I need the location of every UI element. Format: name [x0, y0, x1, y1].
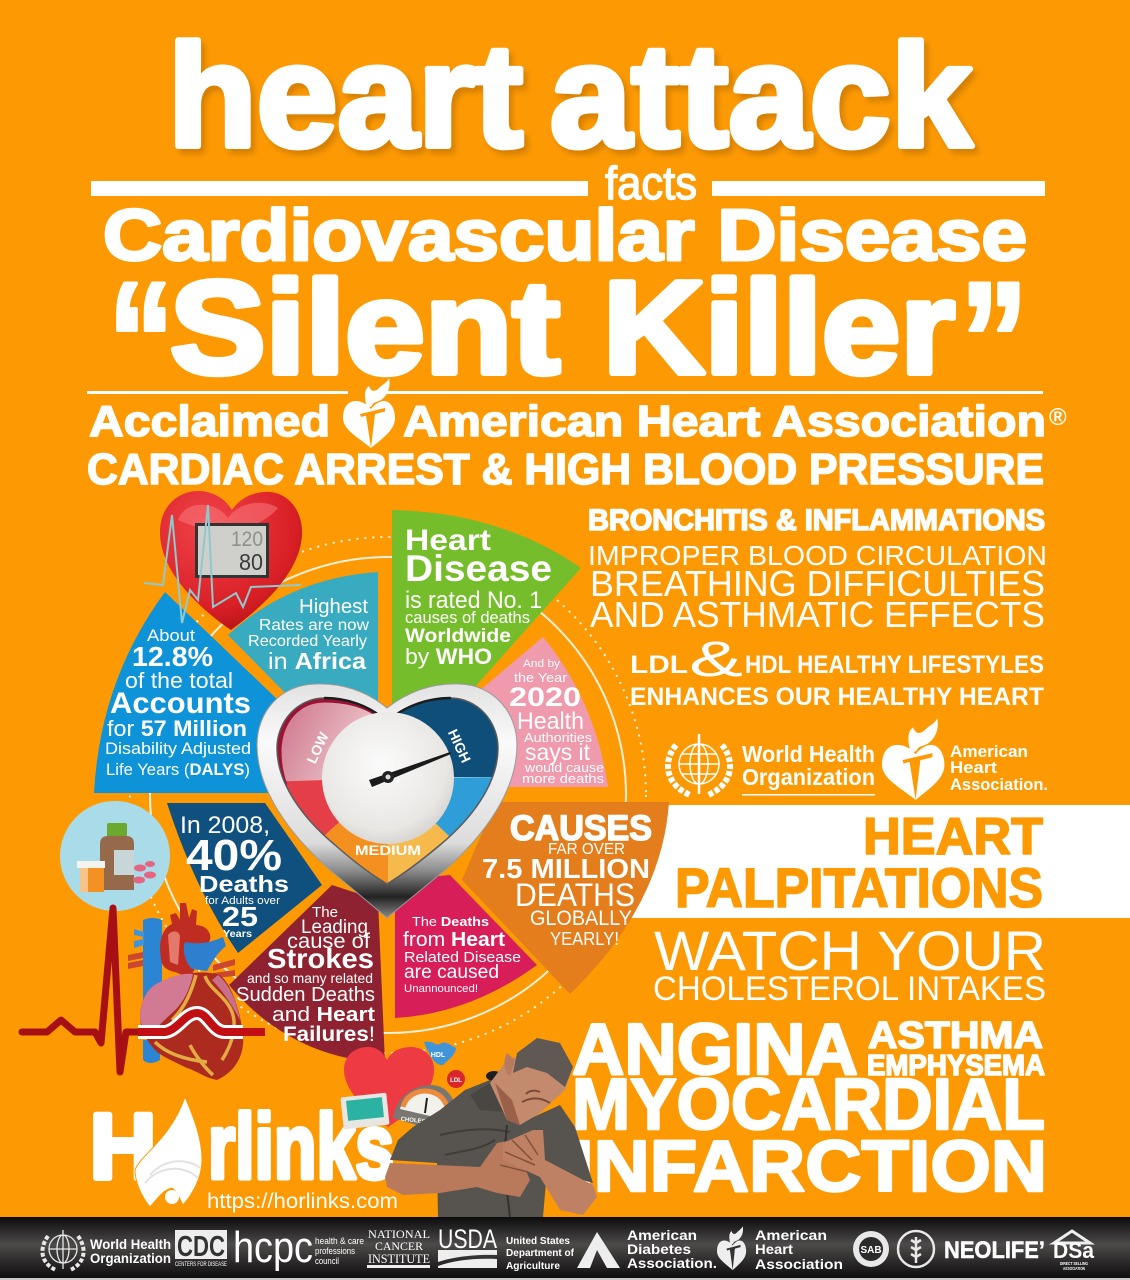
panel: heart disease rated No. 1: causes of deaths: [405, 608, 530, 627]
logo: American Diabetes Association: Association.: [627, 1255, 717, 1271]
right column text: BREATHING DIFFICULTIES: [590, 563, 1045, 604]
panel: leading cause of strokes: and Heart: [272, 1004, 375, 1026]
panel: by the year 2020: more deaths: [522, 771, 605, 786]
panel: leading cause of strokes: Failures!: [283, 1023, 375, 1046]
right column text: LDL: [630, 651, 688, 679]
panel: leading cause of strokes: Strokes: [267, 943, 374, 974]
logo: hcpc: council: [315, 1256, 339, 1266]
text: angina, asthma, emphysema, myocardial infarction: EMPHYSEMA: [867, 1050, 1045, 1082]
logo: SAB seal: [853, 1231, 889, 1267]
text: angina, asthma, emphysema, myocardial infarction: [572, 1010, 1047, 1207]
panel: heart disease rated No. 1: Heart: [405, 524, 491, 557]
heading: Acclaimed American Heart Association: Acclaimed: [89, 397, 330, 446]
panel: heart disease rated No. 1: by WHO: [405, 644, 492, 669]
panel: causes over 7.5 million deaths: 7.5 MILLION: [482, 853, 650, 884]
panel: deaths from heart disease unannounced: are caused: [404, 962, 499, 983]
logo: American Diabetes Association: Diabetes: [627, 1241, 691, 1257]
panel: leading cause of strokes: cause of: [287, 930, 370, 953]
panel: by the year 2020: And by: [523, 658, 561, 670]
title: heart: [168, 14, 523, 177]
panel: by the year 2020: [478, 637, 608, 787]
panel: causes over 7.5 million deaths: GLOBALLY: [530, 907, 632, 930]
logo: WHO footer: World Health: [90, 1236, 171, 1252]
panel: deaths from heart disease unannounced: from Heart: [403, 929, 505, 951]
logo: hcpc: professions: [315, 1246, 355, 1256]
panel: heart disease rated No. 1: Worldwide: [405, 626, 511, 647]
panel: 12.8 percent DALYS: Accounts: [110, 687, 251, 720]
logo: World Health Organization: World Health: [742, 741, 875, 767]
icon: red heart with blood pressure display: 80: [239, 549, 263, 575]
heading: Silent Killer: Silent: [170, 254, 560, 401]
right column text: HDL HEALTHY LIFESTYLES: [745, 651, 1044, 679]
icon: pills and bottle: [60, 801, 170, 911]
right column text: ENHANCES OUR HEALTHY HEART: [630, 683, 1044, 711]
panel: leading cause of strokes: The: [312, 904, 338, 921]
logo: World Health Organization: Organization: [742, 764, 875, 790]
heading: Cardiac arrest and high blood pressure: CARDIAC ARREST & HIGH BLOOD PRESSURE: [87, 445, 1044, 494]
heading: Silent Killer: Killer: [603, 254, 955, 401]
right column text: IMPROPER BLOOD CIRCULATION: [588, 540, 1047, 571]
text: angina, asthma, emphysema, myocardial infarction: INFARCTION: [572, 1127, 1047, 1207]
panel: causes over 7.5 million deaths: YEARLY!: [550, 929, 619, 949]
panel: in 2008 40 percent deaths: 25: [222, 901, 258, 932]
logo: American Diabetes Association: [577, 1227, 717, 1271]
logo: Horlinks: rlinks: [208, 1096, 394, 1198]
logo: hcpc: hcpc: [233, 1223, 313, 1272]
logo: American Heart Association: [882, 718, 1048, 800]
panel: by the year 2020: 2020: [509, 682, 581, 712]
logo: DSA: ASSOCIATION: [1063, 1266, 1085, 1271]
panel: deaths from heart disease unannounced: The Deaths: [412, 914, 489, 929]
logo: hcpc: health & care: [315, 1236, 364, 1246]
icon: American Heart Association logo: [343, 378, 395, 448]
panel: in 2008 40 percent deaths: In 2008,: [180, 812, 270, 839]
heart gauge: HIGH: [445, 727, 474, 765]
panel: highest rates in Africa: [228, 572, 378, 722]
logo: WHO footer: [42, 1230, 171, 1270]
logo: National Cancer Institute: INSTITUTE: [368, 1251, 430, 1266]
logo: wheat seal: [898, 1231, 934, 1267]
panel: deaths from heart disease unannounced: Unannounced!: [404, 983, 478, 995]
panel: causes over 7.5 million deaths: FAR OVER: [548, 841, 625, 858]
logo: National Cancer Institute: CANCER: [375, 1239, 423, 1253]
footer bar with partner logos: [0, 1217, 1130, 1280]
panel: highest rates in Africa: Recorded Yearly: [248, 633, 367, 650]
icon: small heart with monitor and cholesterol gauge: HDL: [431, 1052, 446, 1059]
logo: USDA: Department of: [506, 1247, 574, 1259]
banner: heart palpitations: [620, 805, 1130, 919]
banner: heart palpitations: HEART: [863, 808, 1043, 866]
heading: Silent Killer: “: [108, 248, 174, 432]
icon: small heart with monitor and cholesterol gauge: CHOLESTEROL: [400, 1117, 446, 1127]
panel: deaths from heart disease unannounced: Related Disease: [404, 949, 521, 966]
icon: ECG line through heart: [22, 908, 265, 1072]
logo: American Heart Association footer: Association: [755, 1256, 843, 1272]
panel: in 2008 40 percent deaths: Years: [223, 929, 252, 940]
subtitle: facts with rules: [91, 157, 1045, 209]
icon: small heart with monitor and cholesterol gauge: LDL: [450, 1078, 462, 1084]
logo: American Heart Association footer: Heart: [755, 1241, 793, 1257]
icon: small heart with monitor and cholesterol gauge: [340, 1042, 465, 1129]
heading: Acclaimed American Heart Association: [89, 378, 1067, 448]
logo: American Heart Association: Heart: [950, 758, 997, 777]
logo: CDC: CDC: [177, 1231, 225, 1263]
logo: American Heart Association: Association.: [950, 775, 1048, 794]
heart gauge: LOW: [303, 729, 332, 766]
panel: leading cause of strokes: [229, 885, 385, 1063]
text: website: https://horlinks.com: [207, 1190, 398, 1213]
panel: 12.8 percent DALYS: About: [147, 626, 195, 645]
text: watch your cholesterol intakes: WATCH YOUR: [654, 919, 1046, 982]
logo: National Cancer Institute: NATIONAL: [368, 1227, 430, 1241]
banner: heart palpitations: PALPITATIONS: [675, 856, 1043, 919]
text: angina, asthma, emphysema, myocardial infarction: MYOCARDIAL: [572, 1065, 1045, 1145]
heading: Silent Killer: ”: [960, 248, 1028, 432]
heading: Acclaimed American Heart Association: ®: [1049, 404, 1067, 431]
rule with logo gap: [87, 391, 1043, 394]
text: angina, asthma, emphysema, myocardial infarction: ASTHMA: [868, 1015, 1043, 1057]
logo: USDA: [438, 1224, 574, 1272]
logo: American Heart Association footer: American: [755, 1227, 827, 1243]
text: watch your cholesterol intakes: [653, 919, 1046, 1008]
subtitle: facts with rules: facts: [605, 157, 697, 209]
logo: USDA: United States: [506, 1235, 570, 1247]
logo: USDA: Agriculture: [506, 1260, 560, 1272]
panel: heart disease rated No. 1: Disease: [405, 548, 552, 589]
heading: Silent Killer: [108, 248, 1028, 432]
logo: DSA: DIRECT SELLING: [1060, 1261, 1088, 1266]
right column text: BRONCHITIS & INFLAMMATIONS: [588, 504, 1045, 537]
panel: in 2008 40 percent deaths: Deaths: [199, 871, 289, 897]
panel: heart disease rated No. 1: is rated No. 1: [405, 587, 542, 614]
logo: American Heart Association: American: [950, 742, 1028, 761]
logo: WHO footer: Organization: [90, 1250, 171, 1266]
decorative rings: [130, 537, 646, 1053]
title: [168, 14, 973, 177]
panel: in 2008 40 percent deaths: 40%: [186, 831, 282, 880]
heading: Cardiovascular Disease: Cardiovascular Disease: [103, 196, 1027, 276]
logo: American Heart Association footer: [717, 1226, 843, 1272]
heart gauge: MEDIUM: [355, 842, 421, 858]
heart gauge: [257, 684, 520, 918]
logo: CDC: CENTERS FOR DISEASE: [175, 1262, 227, 1268]
text: angina, asthma, emphysema, myocardial infarction: ANGINA: [572, 1010, 858, 1090]
icon: anatomical heart: [128, 903, 243, 1080]
panel: deaths from heart disease unannounced: [395, 875, 537, 1018]
title: attack: [550, 14, 973, 177]
logo: DSA: [1053, 1231, 1095, 1271]
logo: DSA: DSa: [1053, 1238, 1095, 1263]
panel: by the year 2020: Health: [517, 708, 584, 735]
panel: leading cause of strokes: and so many related: [247, 970, 373, 986]
panel: causes over 7.5 million deaths: DEATHS: [515, 877, 635, 913]
right column text: [588, 504, 1047, 711]
panel: leading cause of strokes: Sudden Deaths: [236, 984, 375, 1006]
logo: National Cancer Institute: [367, 1227, 430, 1268]
logo: SAB seal: SAB: [860, 1245, 882, 1256]
right column text: AND ASTHMATIC EFFECTS: [590, 594, 1045, 635]
panel: 12.8 percent DALYS: Life Years (DALYS): [106, 760, 250, 779]
logo: CDC: [175, 1230, 227, 1268]
panel: causes over 7.5 million deaths: CAUSES: [510, 809, 652, 848]
panel: 12.8 percent DALYS: Disability Adjusted: [105, 739, 251, 758]
right column text: &: [689, 631, 743, 687]
panel: 12.8 percent DALYS: of the total: [125, 668, 233, 693]
panel: heart disease rated No. 1: [392, 510, 581, 722]
logo: World Health Organization: [668, 734, 875, 796]
logo: NeoLife: NEOLIFE’: [944, 1237, 1045, 1264]
panel: by the year 2020: the Year: [514, 670, 568, 685]
panel: 12.8 percent DALYS: 12.8%: [132, 641, 213, 672]
panel: highest rates in Africa: Rates are now: [259, 617, 369, 634]
panel: in 2008 40 percent deaths: [167, 803, 322, 953]
panel: by the year 2020: would cause: [524, 760, 604, 775]
figure: man clutching chest: [385, 1038, 597, 1217]
panel: causes over 7.5 million deaths: [462, 802, 669, 994]
panel: 12.8 percent DALYS: [94, 592, 278, 793]
logo: USDA: USDA: [438, 1224, 497, 1254]
logo: American Diabetes Association: American: [627, 1227, 697, 1243]
panel: highest rates in Africa: Highest: [299, 596, 368, 618]
logo: Horlinks: H: [90, 1096, 156, 1198]
panel: 12.8 percent DALYS: for 57 Million: [107, 716, 247, 741]
heading: Acclaimed American Heart Association: American Heart Association: [403, 397, 1046, 446]
icon: red heart with blood pressure display: [144, 491, 302, 630]
panel: in 2008 40 percent deaths: for Adults over: [205, 895, 280, 907]
panel: highest rates in Africa: in Africa: [268, 648, 366, 674]
icon: red heart with blood pressure display: 120: [231, 528, 263, 551]
panel: leading cause of strokes: Leading: [301, 917, 368, 938]
text: watch your cholesterol intakes: CHOLESTEROL INTAKES: [653, 970, 1046, 1008]
panel: by the year 2020: says it: [525, 739, 591, 765]
logo: Horlinks: [90, 1096, 398, 1213]
panel: by the year 2020: Authorities: [524, 730, 593, 745]
